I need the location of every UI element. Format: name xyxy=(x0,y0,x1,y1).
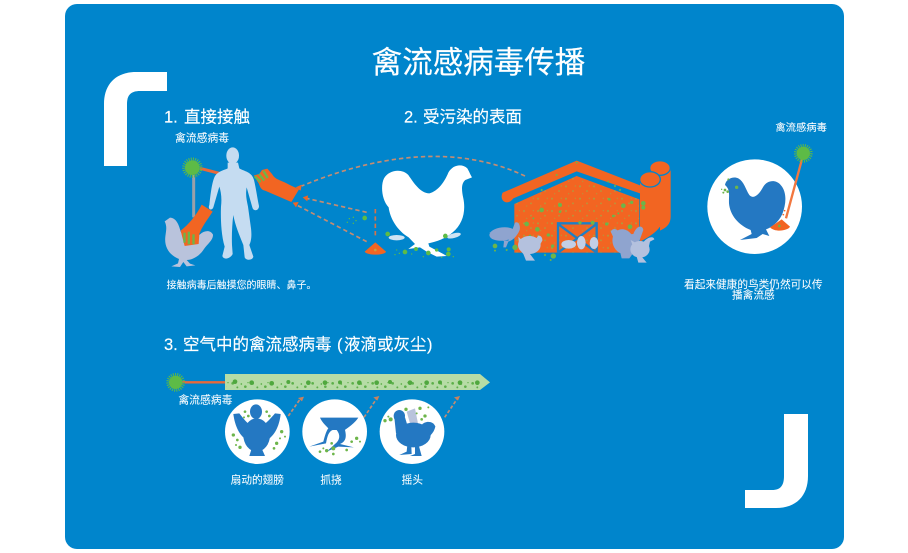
dashed transmission arrows xyxy=(297,156,525,242)
icon: white chicken xyxy=(382,165,472,257)
heading: airborne virus: 液滴或灰尘 xyxy=(344,335,426,354)
icon: white circle with blue chicken xyxy=(707,145,811,254)
droplets xyxy=(383,406,429,422)
icon: circle head shaking xyxy=(380,399,444,464)
heading: airborne virus: 空气中的禽流感病毒 xyxy=(183,335,332,354)
title: 禽流感病毒传播 xyxy=(372,46,585,80)
icon: barn roof xyxy=(502,161,640,202)
icon: person xyxy=(209,147,259,260)
icon: blue chicken xyxy=(725,177,785,240)
label: head shaking: 摇头 xyxy=(402,474,423,487)
icon: circle scratching xyxy=(302,399,367,464)
heading: airborne virus: ( xyxy=(337,336,343,354)
icon: virus right xyxy=(795,145,811,161)
bracket: bottom right corner xyxy=(745,414,808,508)
dashed arrows from circles xyxy=(288,396,460,417)
hen right front xyxy=(630,237,654,263)
label: scratching: 抓挠 xyxy=(320,474,342,487)
icon: virus airborne xyxy=(168,374,184,390)
droplets xyxy=(232,410,286,450)
green droplets xyxy=(347,216,367,224)
panel: barn and healthy bird illustration xyxy=(489,121,827,301)
hen far left xyxy=(489,222,520,247)
caption: healthy birds: 播禽流感 xyxy=(732,288,775,301)
shaking chicken xyxy=(394,410,435,456)
chicks in door xyxy=(561,236,598,249)
icon: droplets at beak xyxy=(721,178,738,194)
icon: contaminated pile xyxy=(365,242,386,255)
heading: direct contact: 直接接触 xyxy=(184,108,250,126)
contamination droplets on barn xyxy=(493,162,646,261)
panel: direct contact and surface illustration xyxy=(165,130,525,291)
hen right behind xyxy=(609,226,643,258)
hen front left xyxy=(518,236,542,261)
heading: contaminated surfaces: 2. xyxy=(404,108,418,126)
caption: healthy birds xyxy=(684,278,823,301)
band: airborne droplets xyxy=(225,374,490,390)
virus connector lines xyxy=(194,168,219,217)
icon: barn chickens xyxy=(489,222,654,263)
icon: circle flapping wings xyxy=(225,399,290,464)
icon: virus left xyxy=(184,159,201,176)
label: avian flu virus left: 禽流感病毒 xyxy=(175,130,229,144)
heading: direct contact: 1. xyxy=(164,108,178,126)
connector line xyxy=(180,379,225,386)
caption: healthy birds: 看起来健康的鸟类仍然可以传 xyxy=(684,278,823,291)
bracket: top left corner xyxy=(104,72,167,166)
icon: barn wall xyxy=(514,176,639,253)
caption: direct contact: 接触病毒后触摸您的眼睛、鼻子。 xyxy=(167,278,316,291)
heading: contaminated surfaces: 受污染的表面 xyxy=(423,108,522,126)
feathers xyxy=(389,232,461,240)
icon: barn door xyxy=(558,223,597,253)
icon: upper glove xyxy=(254,169,299,202)
heading: airborne virus: 3. xyxy=(164,336,178,354)
label: avian flu virus right: 禽流感病毒 xyxy=(775,121,827,134)
droplets around white chicken xyxy=(385,232,454,258)
label: avian flu virus airborne: 禽流感病毒 xyxy=(178,392,233,406)
label: flapping wings: 扇动的翅膀 xyxy=(231,474,284,487)
flapping chicken xyxy=(233,404,281,456)
panel: airborne illustration xyxy=(168,374,490,487)
heading: airborne virus: ) xyxy=(427,336,432,354)
speckled contamination xyxy=(514,176,639,253)
icon: lower glove xyxy=(181,205,213,246)
droplets xyxy=(319,437,361,455)
icon: grey chicken xyxy=(165,218,213,267)
arrowheads xyxy=(293,185,308,207)
icon: droppings pile and stick xyxy=(770,157,803,231)
icon: silos xyxy=(640,161,671,242)
